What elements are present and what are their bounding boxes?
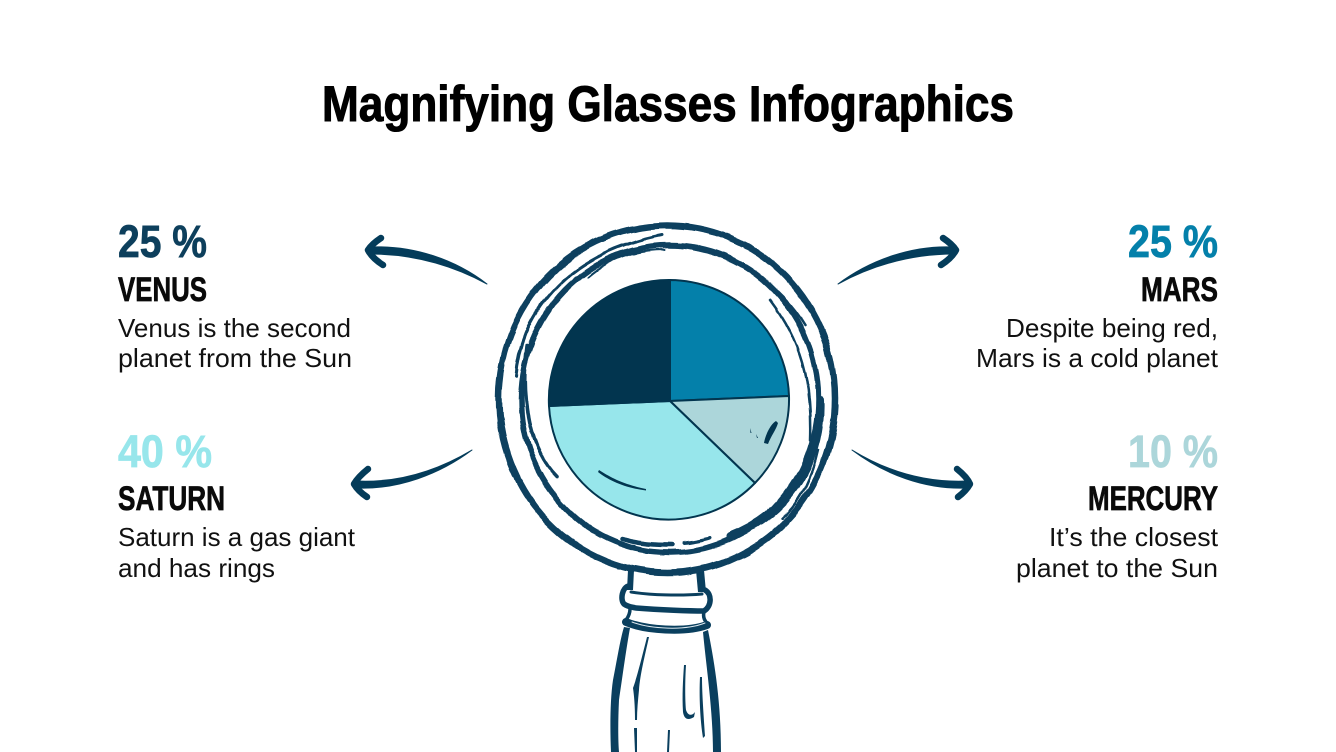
sketch strokes [516,235,662,376]
slice: venus 25% [549,280,670,406]
venus description: planet from the Sun [118,343,352,373]
arrow: to mars [838,238,956,284]
mercury heading: MERCURY [1088,480,1218,518]
magnifying glass handle [610,570,721,752]
mars heading: MARS [1141,271,1218,309]
saturn description: and has rings [118,553,275,583]
saturn percentage: 40 % [118,426,212,477]
saturn heading: SATURN [118,480,225,518]
title: Magnifying Glasses Infographics [322,76,1014,132]
outer ring [499,226,835,572]
arrow: to saturn [354,450,472,497]
pie chart [549,280,789,519]
panel: saturn [118,426,356,583]
panel: mars [976,216,1219,373]
mars description: Despite being red, [1006,313,1218,343]
handle neck [627,570,706,592]
saturn description: Saturn is a gas giant [118,522,356,552]
slice: mercury 10% [670,396,789,483]
mercury description: planet to the Sun [1016,553,1218,583]
handle collar [622,586,710,630]
venus percentage: 25 % [118,216,207,267]
panel: mercury [1016,426,1219,583]
magnifying glass lens frame [499,226,835,572]
mercury percentage: 10 % [1128,426,1218,477]
slice: saturn 40% [549,401,755,519]
venus description: Venus is the second [118,313,351,343]
inner ring [521,246,818,552]
mars description: Mars is a cold planet [976,343,1219,373]
mars percentage: 25 % [1128,216,1218,267]
slice: mars 25% [670,280,789,401]
mercury description: It’s the closest [1049,522,1219,552]
handle sides [610,627,630,752]
panel: venus [118,216,352,373]
venus heading: VENUS [118,271,207,309]
handle hatching [633,637,649,720]
arrow: to venus [368,238,487,284]
arrow: to mercury [852,450,970,497]
pie sketch marks [598,421,778,490]
